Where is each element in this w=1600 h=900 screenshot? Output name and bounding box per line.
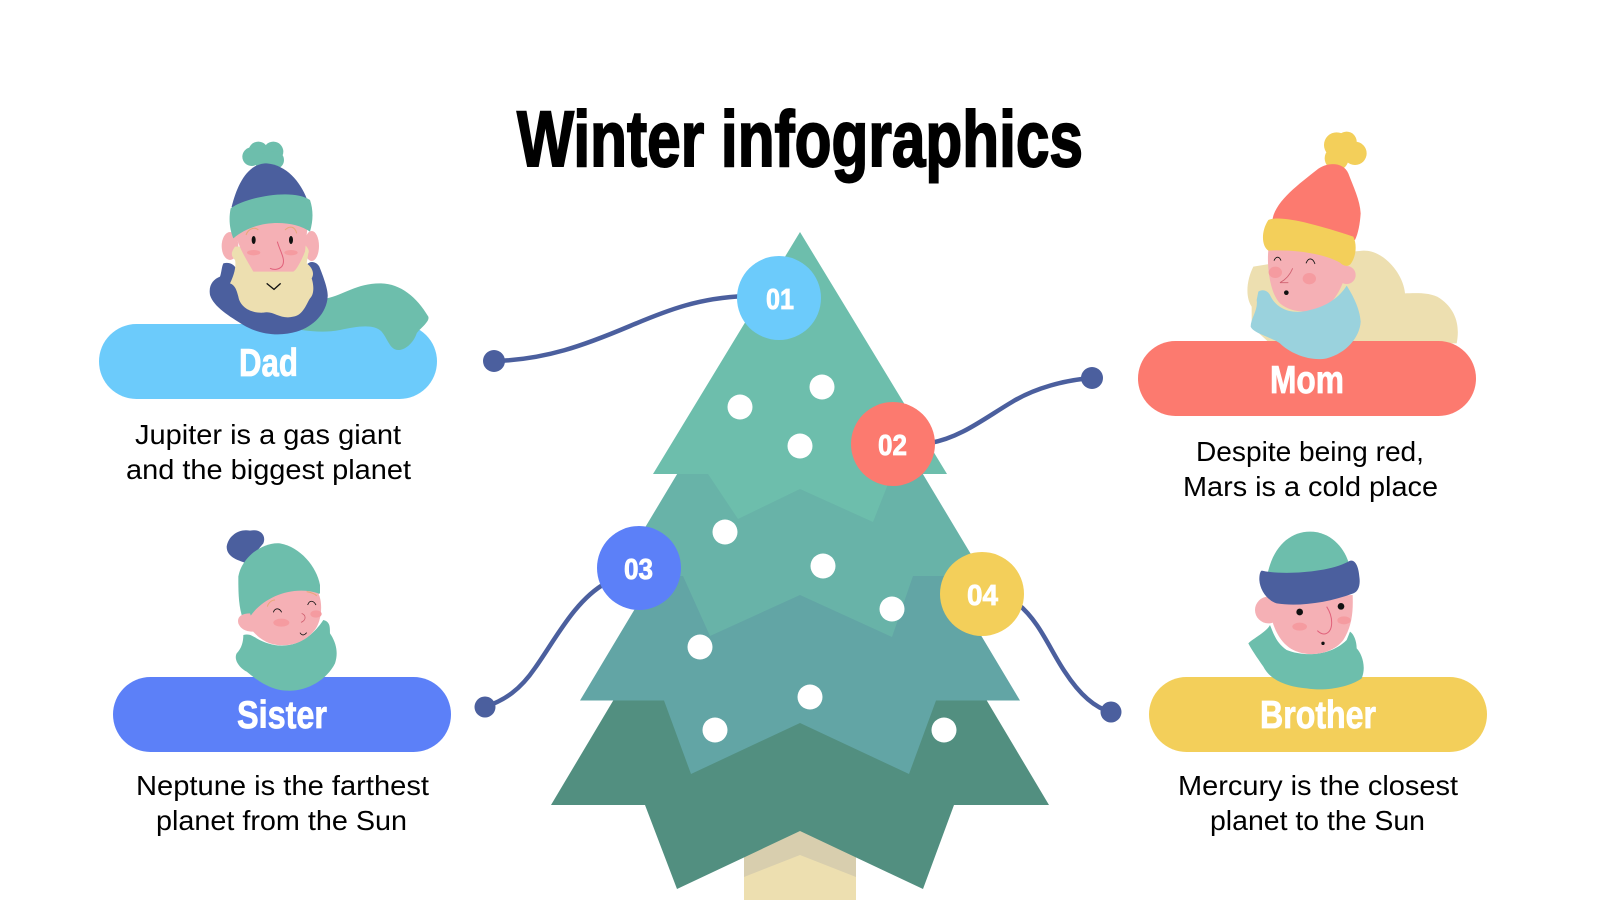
Sister description: planet from the Sun <box>156 805 407 836</box>
Sister pill <box>113 677 451 752</box>
tree layer 2 <box>616 269 984 637</box>
icon: Mom character <box>1251 132 1367 359</box>
icon: Sister character <box>227 530 337 691</box>
number badge 01: 01 <box>766 284 794 316</box>
connector 02 <box>930 367 1103 443</box>
Mom description: Despite being red, <box>1196 436 1424 467</box>
Mom description: Mars is a cold place <box>1183 471 1438 502</box>
title: Winter infographics <box>517 94 1083 183</box>
panel: Brother <box>1149 532 1487 836</box>
icon: Brother character <box>1248 532 1364 689</box>
snow dots <box>688 374 956 742</box>
number badge 03 <box>597 526 681 610</box>
number badge 02: 02 <box>878 430 907 462</box>
connector 03 <box>474 583 606 718</box>
tree layer 1 <box>653 232 947 522</box>
number badge 04 <box>940 552 1024 636</box>
Sister description <box>136 770 429 836</box>
Dad pill <box>99 324 437 399</box>
Dad label: Dad <box>239 342 298 385</box>
Brother label: Brother <box>1260 694 1376 737</box>
Mom pill <box>1138 341 1476 416</box>
number badge 01 <box>737 256 821 340</box>
Dad description: Jupiter is a gas giant <box>135 419 401 450</box>
connector 04 <box>1018 604 1122 722</box>
Brother description: Mercury is the closest <box>1178 770 1458 801</box>
Brother pill <box>1149 677 1487 752</box>
tree trunk <box>744 820 856 900</box>
connector 01 <box>483 296 745 372</box>
number badge 03: 03 <box>624 554 653 586</box>
Mom label: Mom <box>1270 359 1344 402</box>
tree layer 4 <box>551 387 1049 889</box>
Dad description: and the biggest planet <box>126 454 411 485</box>
number badge 04: 04 <box>967 580 998 612</box>
panel: Sister <box>113 530 451 836</box>
panel: Mom <box>1138 132 1476 502</box>
Sister description: Neptune is the farthest <box>136 770 429 801</box>
Sister label: Sister <box>237 694 327 737</box>
Brother description: planet to the Sun <box>1210 805 1425 836</box>
tree layer 3 <box>580 333 1020 774</box>
Dad description <box>126 419 411 485</box>
Brother description <box>1178 770 1458 836</box>
panel: Dad <box>99 142 437 485</box>
Mom description <box>1183 436 1438 502</box>
icon: Dad character <box>210 142 429 350</box>
number badge 02 <box>851 402 935 486</box>
christmas tree <box>551 232 1049 900</box>
Mom hair <box>1247 251 1458 343</box>
